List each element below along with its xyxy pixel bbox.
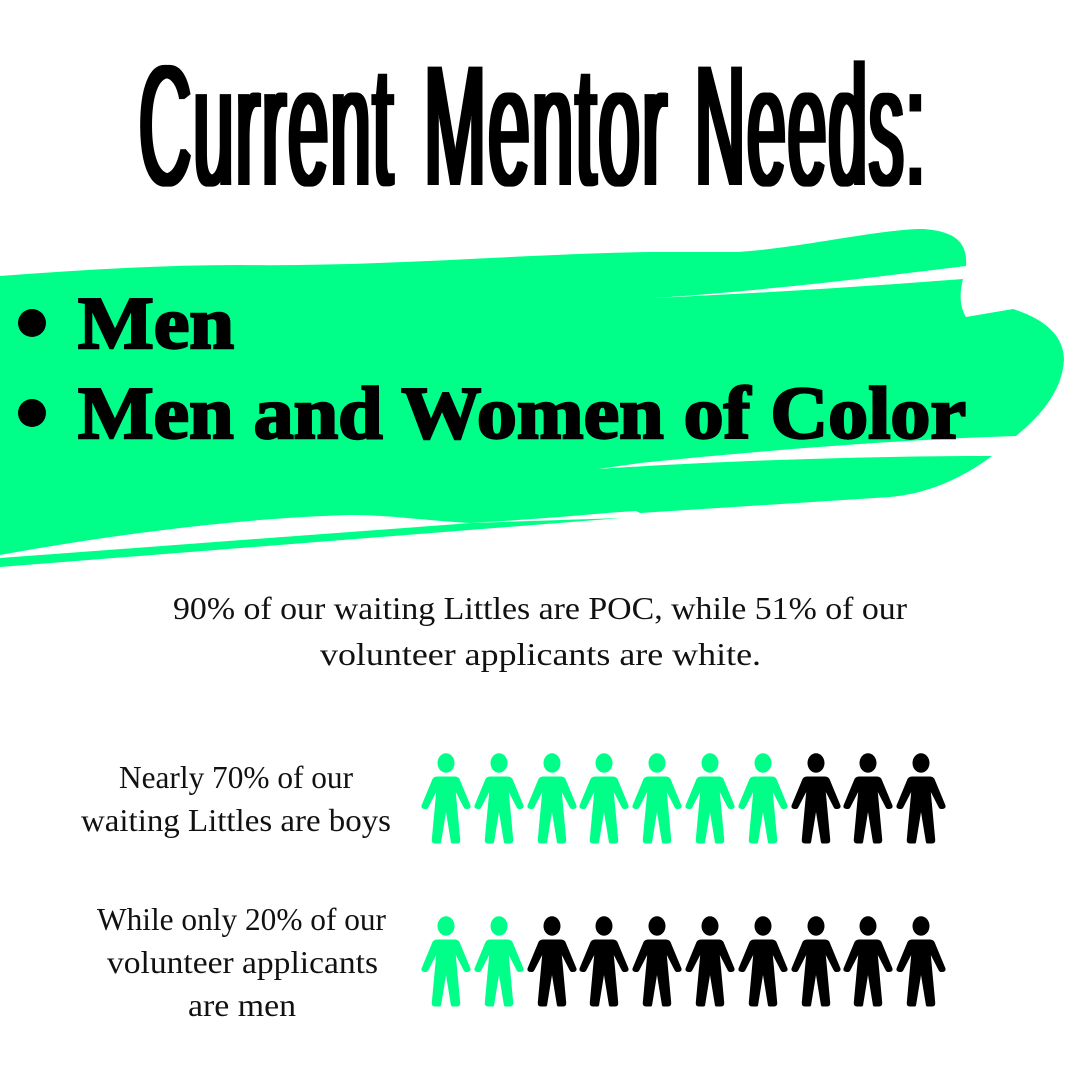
boys statistic text [81, 759, 391, 838]
bullet: men: Men [78, 283, 234, 365]
men applicants statistic text: volunteer applicants [107, 944, 378, 980]
title: Mentor [424, 30, 669, 222]
boys statistic text: Nearly 70% of our [119, 759, 353, 795]
statement text: 90% of our waiting Littles are POC, while 51% of our [173, 590, 907, 626]
statement text: volunteer applicants are white. [320, 636, 761, 672]
pictogram: 2 of 10 men [421, 916, 946, 1006]
men applicants statistic text [97, 901, 386, 1023]
men applicants statistic text: While only 20% of our [97, 901, 386, 937]
bullet: men [18, 283, 234, 365]
statement text [173, 590, 907, 672]
pictogram: 7 of 10 boys [421, 753, 946, 844]
boys statistic text: waiting Littles are boys [81, 802, 391, 838]
bullet list [18, 283, 966, 455]
bullet: men and women of color: Men and Women of Color [78, 373, 966, 455]
men applicants statistic text: are men [188, 987, 296, 1023]
title: Current [139, 30, 395, 222]
green brush stroke panel [0, 229, 1064, 567]
